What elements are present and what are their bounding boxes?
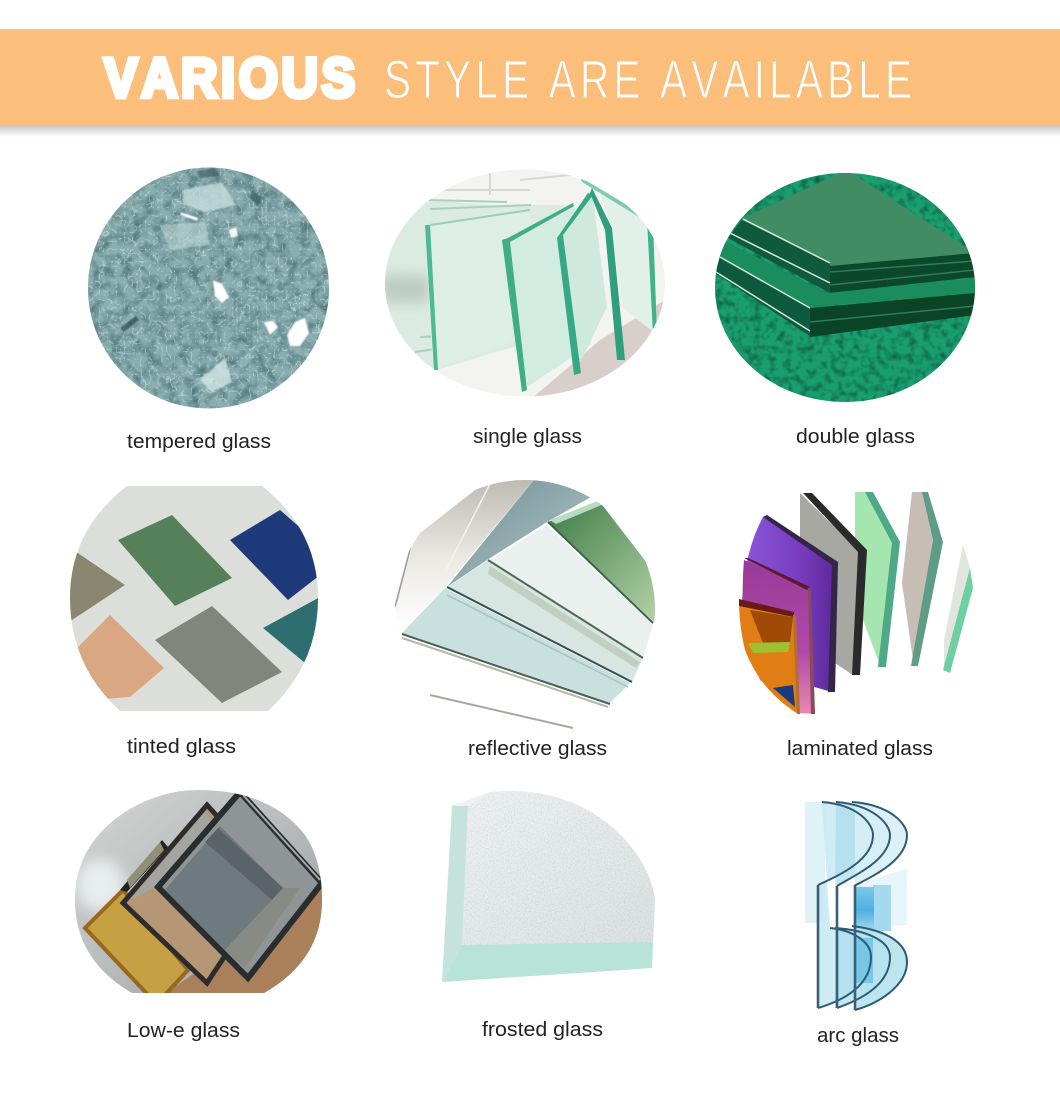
heading: style are available: STYLE ARE AVAILABLE xyxy=(384,50,912,110)
green pane xyxy=(855,492,900,667)
fourth pane edge xyxy=(590,188,625,360)
photo: reflective glass sheets xyxy=(392,475,660,740)
photo: curved glass panes xyxy=(805,802,907,1010)
label: frosted glass xyxy=(482,1019,603,1041)
panel: reflective glass xyxy=(392,475,660,760)
title banner xyxy=(0,29,1060,137)
second pane xyxy=(510,206,591,387)
label: Low-e glass xyxy=(127,1020,240,1042)
panel: Low-e glass xyxy=(70,785,330,1042)
photo: frosted glass slab xyxy=(442,791,655,982)
label: double glass xyxy=(796,426,915,448)
photo: laminated glass panes xyxy=(739,492,973,714)
middle unit xyxy=(120,801,226,987)
panel: arc glass xyxy=(805,802,907,1047)
panel: double glass xyxy=(712,170,978,448)
label: tinted glass xyxy=(127,736,236,758)
heading: various: VARIOUS xyxy=(104,48,355,110)
rear right pane xyxy=(600,194,653,331)
panel: laminated glass xyxy=(739,492,973,760)
purple pane xyxy=(742,515,838,692)
photo: single glass panes xyxy=(380,165,670,405)
panel: single glass xyxy=(380,165,670,448)
magenta pane xyxy=(743,558,815,714)
photo: double glass stack on carpet xyxy=(712,170,978,406)
orange pane xyxy=(739,599,800,714)
photo: tinted glass samples xyxy=(65,480,325,715)
third pane xyxy=(576,194,607,362)
small pane xyxy=(943,545,973,673)
front unit xyxy=(158,792,322,978)
photo: Low-e insulated units xyxy=(70,785,330,997)
taupe pane xyxy=(902,492,943,666)
panel: frosted glass xyxy=(442,791,655,1041)
panel: tempered glass xyxy=(85,165,333,453)
panel: tinted glass xyxy=(65,480,325,758)
label: laminated glass xyxy=(787,738,933,760)
label: reflective glass xyxy=(468,738,607,760)
label: tempered glass xyxy=(127,431,271,453)
back-left pane xyxy=(428,276,515,350)
label: arc glass xyxy=(817,1025,899,1047)
gray pane xyxy=(800,493,867,675)
photo: tempered glass shards xyxy=(85,165,333,413)
label: single glass xyxy=(473,426,582,448)
